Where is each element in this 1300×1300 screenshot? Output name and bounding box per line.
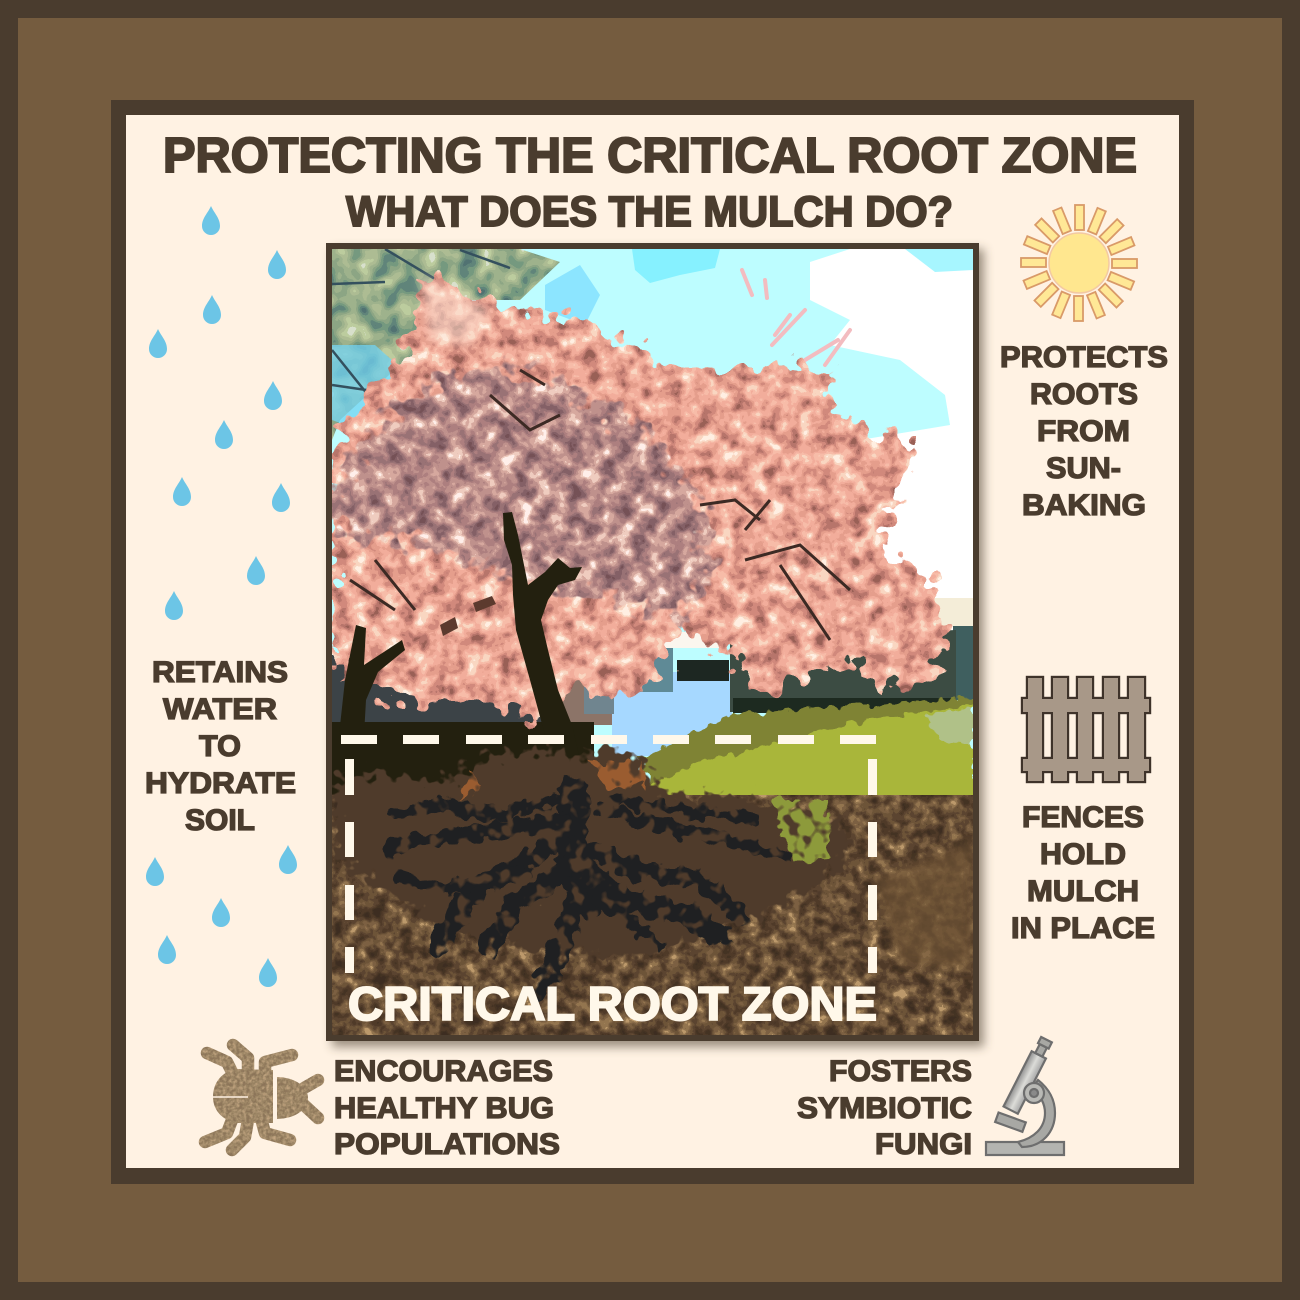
icon: bug (205, 1045, 318, 1150)
text: encourages bug populations (334, 1055, 560, 1161)
text: fences hold mulch: HOLD (1040, 838, 1126, 871)
title: PROTECTING THE CRITICAL ROOT ZONE (163, 129, 1137, 183)
text: fosters symbiotic fungi (797, 1055, 972, 1161)
trunk (503, 512, 582, 722)
background tree, upper left (332, 249, 560, 440)
mulch (332, 745, 973, 1037)
text: protects roots: SUN- (1046, 452, 1121, 485)
roots (390, 790, 785, 990)
wispy blossoms, upper right (742, 270, 850, 365)
text: fosters symbiotic fungi: FOSTERS (829, 1055, 972, 1088)
text: fences hold mulch: MULCH (1027, 875, 1139, 908)
text: retains water: TO (199, 730, 241, 763)
critical root zone dashed outline (341, 735, 877, 973)
distant building and hedge (332, 598, 973, 756)
text: retains water: HYDRATE (145, 767, 296, 800)
text: protects roots (1000, 341, 1168, 522)
text: retains water: WATER (163, 693, 277, 726)
panel: tree and root zone photo (326, 243, 979, 1041)
dark ground (332, 722, 594, 802)
canopy (332, 273, 950, 718)
sky (332, 249, 973, 783)
text: encourages bug populations: HEALTHY BUG (334, 1092, 554, 1125)
photo shadow (332, 249, 984, 1047)
photo label: CRITICAL ROOT ZONE (348, 977, 877, 1030)
icon: water drops, lower group (146, 845, 297, 987)
grass (640, 698, 973, 806)
text: fences hold mulch (1011, 801, 1155, 945)
icon: microscope (986, 1036, 1064, 1155)
subtitle: WHAT DOES THE MULCH DO? (346, 188, 953, 236)
text: retains water: SOIL (185, 804, 255, 837)
text: protects roots: FROM (1037, 415, 1130, 448)
text: retains water: RETAINS (152, 656, 288, 689)
text: encourages bug populations: ENCOURAGES (334, 1055, 553, 1088)
text: fences hold mulch: FENCES (1022, 801, 1144, 834)
second trunk (340, 625, 405, 722)
text: fosters symbiotic fungi: FUNGI (875, 1128, 972, 1161)
text: protects roots: PROTECTS (1000, 341, 1168, 374)
text: fences hold mulch: IN PLACE (1011, 912, 1155, 945)
bug shell slit (212, 1096, 248, 1098)
icon: water drops, upper group (149, 206, 290, 620)
text: retains water (145, 656, 296, 837)
icon: fence (1022, 677, 1150, 782)
text: protects roots: BAKING (1022, 489, 1146, 522)
text: fosters symbiotic fungi: SYMBIOTIC (797, 1092, 972, 1125)
text: encourages bug populations: POPULATIONS (334, 1128, 560, 1161)
text: protects roots: ROOTS (1030, 378, 1138, 411)
icon: sun (1021, 205, 1137, 321)
